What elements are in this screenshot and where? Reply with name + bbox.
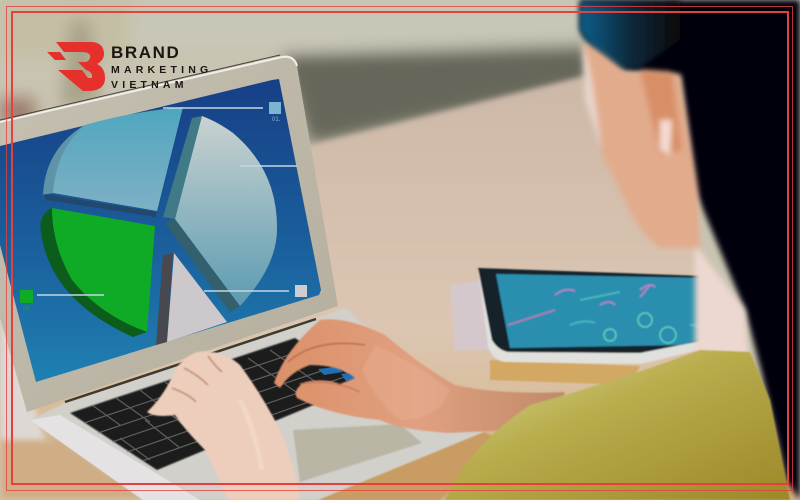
logo wordmark: BRAND [111, 43, 180, 62]
laptop base [30, 308, 484, 500]
trackpad [293, 424, 422, 482]
legend marker 04: 04 [23, 306, 30, 312]
pie slice: green [40, 208, 155, 337]
pie slice: upper left [43, 107, 183, 218]
legend marker 01 [269, 102, 281, 123]
left hand on keyboard [147, 351, 300, 500]
right hand on keyboard [274, 319, 565, 433]
woman: hair [580, 0, 800, 500]
logo wordmark: MARKETING [111, 64, 212, 76]
legend marker bottom right [295, 285, 307, 297]
keyboard [70, 338, 364, 470]
legend lines [37, 108, 297, 295]
pie slice: right [163, 116, 277, 312]
woman: shirt [445, 350, 790, 500]
woman: blue hair highlight [580, 2, 680, 70]
logo wordmark [111, 43, 212, 91]
laptop lid [0, 55, 338, 412]
logo wordmark: VIETNAM [111, 79, 188, 91]
pie chart [40, 107, 277, 345]
logo mark: red B [47, 42, 105, 91]
legend marker 01: 01. [272, 117, 281, 123]
blue highlighted keys [318, 367, 364, 392]
laptop screen [0, 79, 321, 382]
pie slice: bottom [156, 253, 227, 345]
tablet on the desk [478, 268, 706, 364]
legend marker 04 [20, 290, 33, 312]
logo [47, 42, 212, 91]
woman: face and neck [582, 42, 748, 355]
tablet screen [496, 274, 706, 348]
